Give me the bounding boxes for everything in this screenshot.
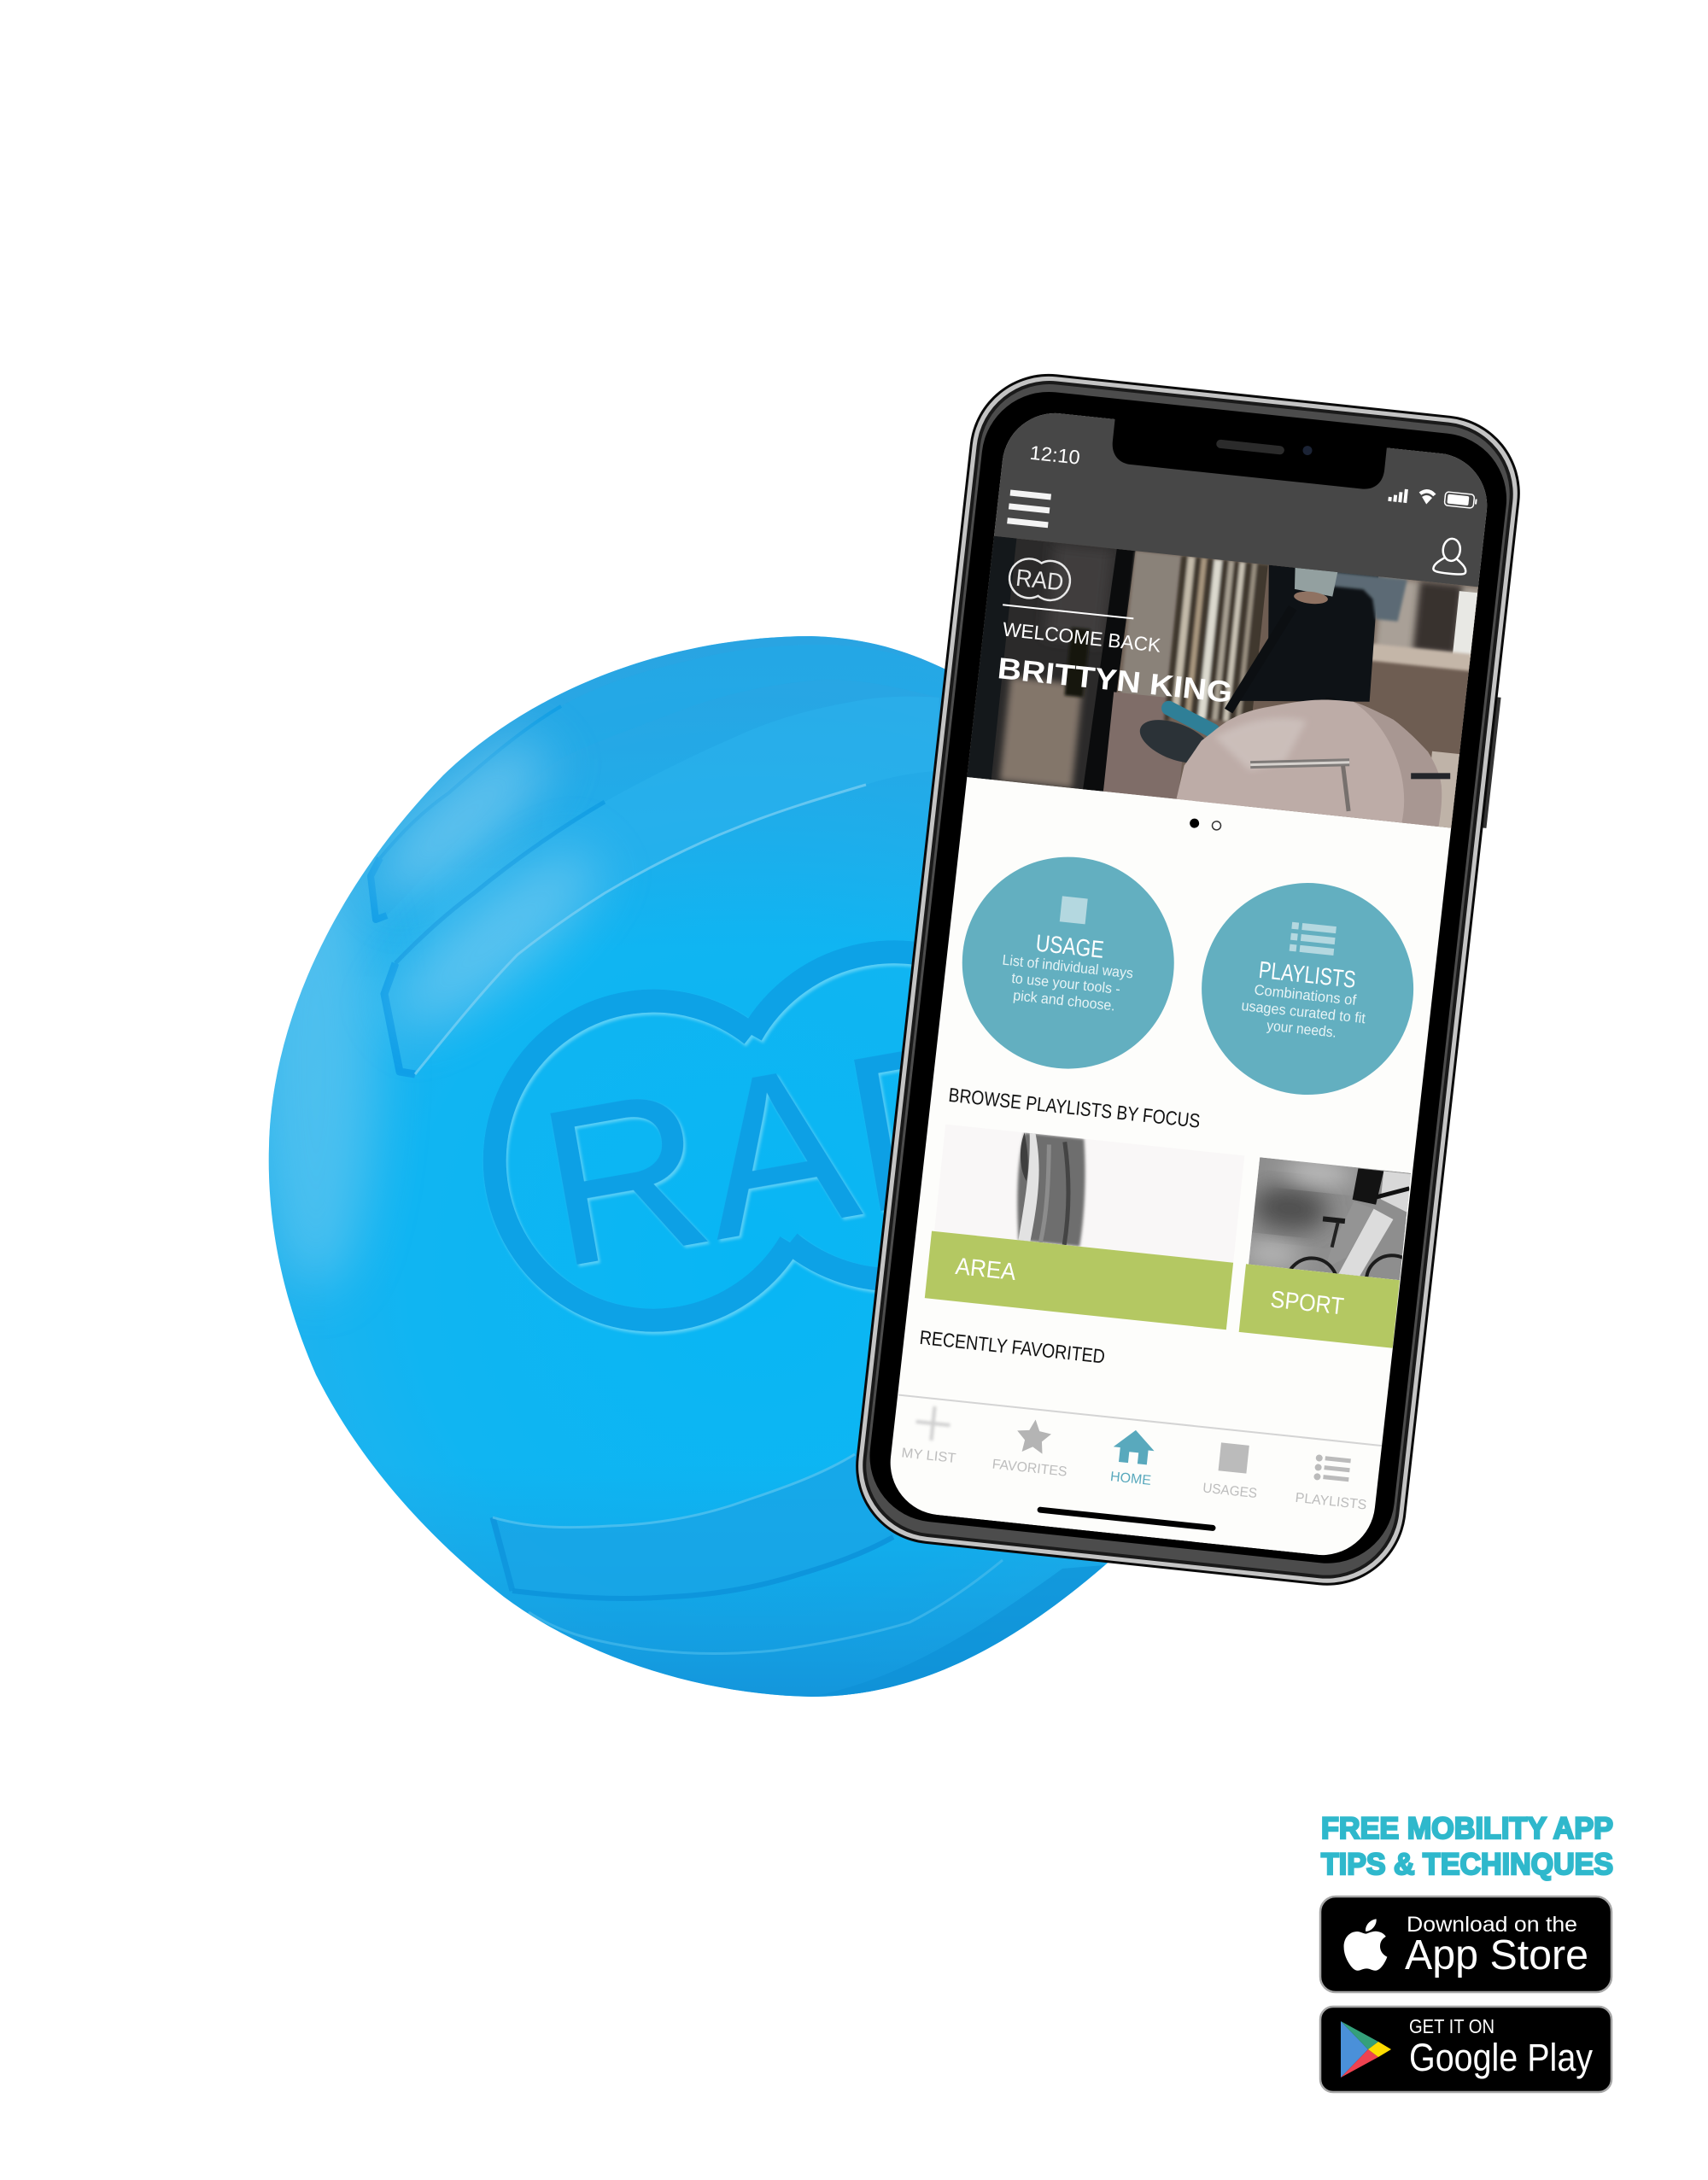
welcome divider (1003, 605, 1133, 618)
embossed RAD logo rings (483, 940, 914, 1335)
Google Play badge (1320, 2007, 1611, 2092)
google play small text: GET IT ON (1409, 2015, 1494, 2037)
playlists description: usages curated to fit (1241, 997, 1366, 1026)
usage heading: USAGE (1034, 930, 1105, 963)
playlists description: your needs. (1266, 1017, 1337, 1041)
home indicator (1037, 1506, 1216, 1531)
status and navigation header (994, 413, 1487, 587)
usage icon (1060, 896, 1088, 924)
window stripes (1161, 556, 1272, 767)
browse heading: BROWSE PLAYLISTS BY FOCUS (948, 1084, 1202, 1132)
playlists description: Combinations of (1254, 982, 1357, 1008)
playlists icon (1290, 922, 1337, 956)
icon: apple (1344, 1919, 1387, 1971)
tab: usages: USAGES (1202, 1481, 1258, 1501)
tab bar divider (892, 1394, 1394, 1447)
cyclist photo (1237, 1154, 1429, 1320)
blue RAD massage ball (256, 632, 1153, 1699)
usage description: List of individual ways (1002, 952, 1134, 982)
pagination dots (1190, 818, 1221, 831)
sport label: SPORT (1269, 1286, 1345, 1319)
welcome text: WELCOME BACK (1002, 618, 1162, 657)
hamburger menu icon (1007, 489, 1051, 528)
app promo heading (1321, 1812, 1613, 1881)
sweater (1290, 568, 1407, 622)
tab: my list (901, 1404, 962, 1466)
mid interior (1103, 551, 1182, 799)
bag straps detail (1225, 638, 1269, 714)
tab: usages (1202, 1441, 1262, 1501)
tab: favorites: FAVORITES (991, 1458, 1068, 1480)
RAD logo small (1008, 557, 1072, 602)
playlists description (1239, 980, 1368, 1043)
usage description (1003, 955, 1132, 1011)
user name: BRITTYN KING (996, 652, 1234, 710)
hero photo: woman carrying gym bag (956, 535, 1492, 836)
status time: 12:10 (1029, 441, 1081, 469)
gym bag (1177, 700, 1435, 827)
area tile (925, 1124, 1244, 1330)
tab: home: HOME (1109, 1470, 1152, 1488)
notch (1097, 407, 1401, 493)
phone frame (847, 366, 1531, 1593)
sport tile (1234, 1154, 1429, 1350)
recently favorited heading: RECENTLY FAVORITED (919, 1326, 1106, 1368)
area green bar (925, 1231, 1233, 1330)
tab: my list: MY LIST (901, 1446, 956, 1466)
embossed RAD letters: RAD (524, 989, 1029, 1314)
usage description: to use your tools - (1011, 970, 1121, 997)
usage description: pick and choose. (1012, 987, 1116, 1014)
area label: AREA (954, 1253, 1017, 1285)
usage circle (962, 857, 1174, 1069)
playlists heading: PLAYLISTS (1258, 956, 1357, 993)
icon: play triangle (1341, 2021, 1391, 2078)
RAD logo small: RAD (1015, 564, 1065, 595)
App Store badge (1320, 1897, 1611, 1992)
upper groove strip (361, 705, 565, 923)
black foam roller (1139, 720, 1204, 763)
app promo heading: FREE MOBILITY APP (1321, 1812, 1613, 1845)
legs and straps (1240, 565, 1378, 702)
bottom groove strip (490, 1453, 1105, 1696)
phone screen (880, 406, 1506, 1566)
muscle illustration (1011, 1132, 1091, 1247)
smartphone (847, 365, 1531, 1594)
tab: home (1109, 1428, 1156, 1488)
app store large text: App Store (1405, 1932, 1588, 1978)
middle groove strip (380, 784, 866, 1078)
sport green bar (1239, 1264, 1400, 1348)
tab: playlists (1295, 1452, 1372, 1513)
blue tool (1167, 708, 1214, 731)
tab: playlists: PLAYLISTS (1295, 1491, 1367, 1513)
app store small text: Download on the (1407, 1913, 1577, 1937)
right background (1243, 564, 1492, 833)
app promo heading: TIPS & TECHINQUES (1321, 1848, 1613, 1881)
tab: favorites (991, 1416, 1072, 1480)
user profile icon (1433, 537, 1469, 576)
google play large text: Google Play (1409, 2036, 1593, 2079)
left interior (957, 535, 1136, 792)
playlists circle (1191, 873, 1424, 1105)
signal, wifi and battery icons (1388, 488, 1477, 509)
